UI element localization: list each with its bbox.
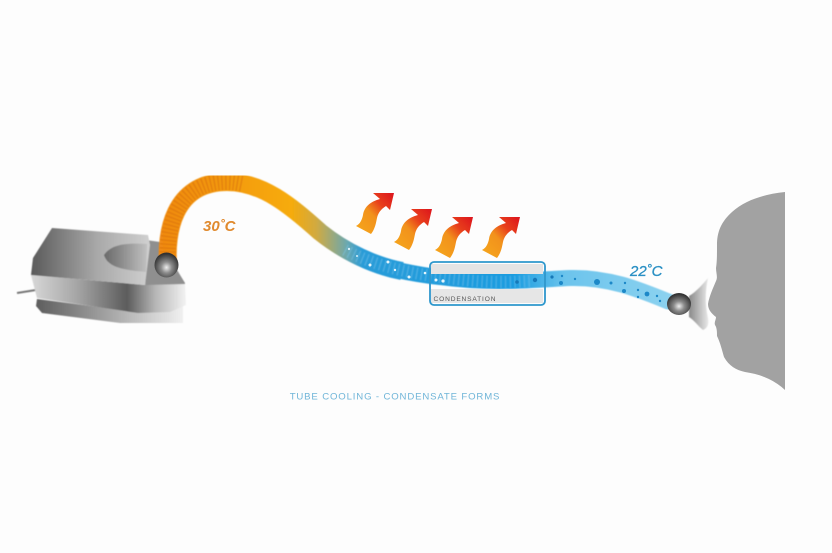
heat arrows (356, 193, 520, 258)
arrow 4 (482, 217, 520, 258)
condensation callout (430, 262, 545, 305)
callout label: CONDENSATION (434, 296, 496, 303)
tube: warm to cool (168, 182, 672, 303)
arrow 1 (356, 193, 394, 234)
tube right section (397, 270, 672, 303)
orange ribs (168, 182, 243, 264)
machine base (36, 299, 183, 323)
label: 30°C: 30˚C (203, 218, 237, 235)
caption: TUBE COOLING - CONDENSATE FORMS (290, 392, 500, 402)
machine top recess (104, 244, 147, 272)
callout grey band top (431, 264, 543, 274)
label: 22°C: 22˚C (629, 263, 663, 280)
arrow 2 (394, 209, 432, 250)
blue ribs (345, 250, 530, 282)
head silhouette (708, 192, 785, 390)
callout grey band bottom (431, 289, 543, 303)
callout frame (430, 262, 545, 305)
machine front band (31, 275, 186, 313)
mask connector (667, 293, 691, 315)
condensation bubbles (348, 248, 661, 302)
machine cable (17, 290, 36, 293)
machine connector (154, 252, 178, 278)
machine rear panel (145, 240, 185, 295)
mask (689, 278, 708, 330)
arrow 3 (435, 217, 473, 258)
tube left section (168, 182, 402, 271)
icon: CPAP machine (17, 228, 186, 323)
machine top (31, 228, 150, 285)
